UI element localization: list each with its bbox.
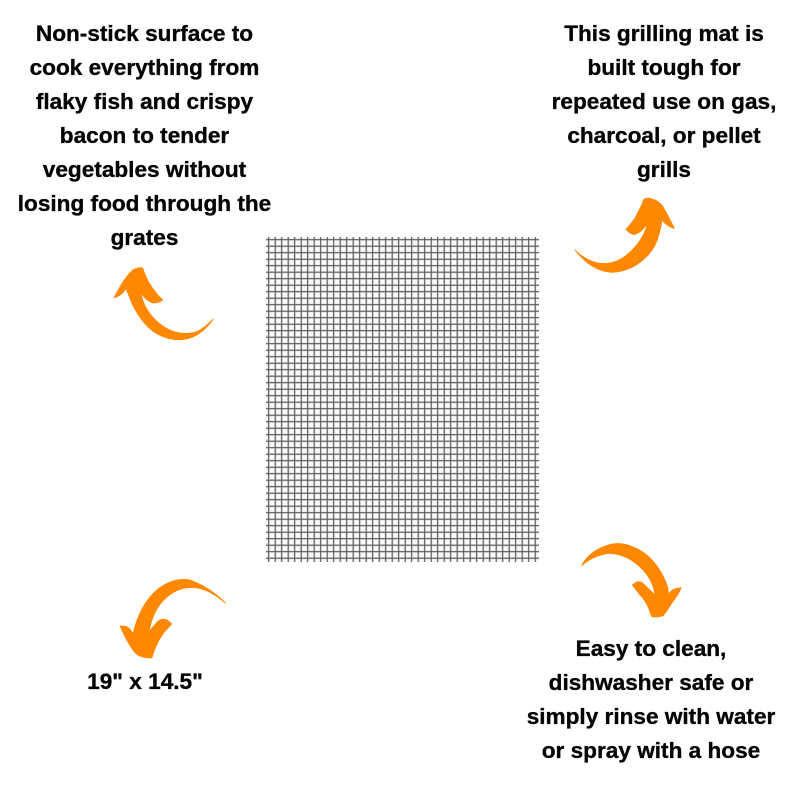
- text: built tough: built tough for: [587, 55, 741, 80]
- text: built tough: repeated use on gas,: [552, 89, 776, 114]
- text: easy to clean: or spray with a hose: [542, 738, 760, 763]
- text: non-stick surface: losing food through the: [18, 191, 271, 216]
- text: easy to clean: [527, 636, 776, 763]
- text: built tough: This grilling mat is: [564, 21, 764, 46]
- text: non-stick surface: vegetables without: [43, 157, 246, 182]
- text: non-stick surface: bacon to tender: [60, 123, 229, 148]
- text: non-stick surface: cook everything from: [30, 55, 259, 80]
- text: non-stick surface: flaky fish and crispy: [36, 89, 253, 114]
- text: easy to clean: dishwasher safe or: [549, 670, 753, 695]
- text: non-stick surface: [18, 21, 271, 250]
- text: non-stick surface: Non-stick surface to: [36, 21, 253, 46]
- text: easy to clean: simply rinse with water: [527, 704, 775, 729]
- text: built tough: grills: [637, 157, 691, 182]
- text: non-stick surface: grates: [111, 225, 178, 250]
- text: built tough: charcoal, or pellet: [567, 123, 761, 148]
- text: dimensions: 19" x 14.5": [87, 669, 203, 694]
- text: easy to clean: Easy to clean,: [576, 636, 726, 661]
- text: built tough: [552, 21, 776, 182]
